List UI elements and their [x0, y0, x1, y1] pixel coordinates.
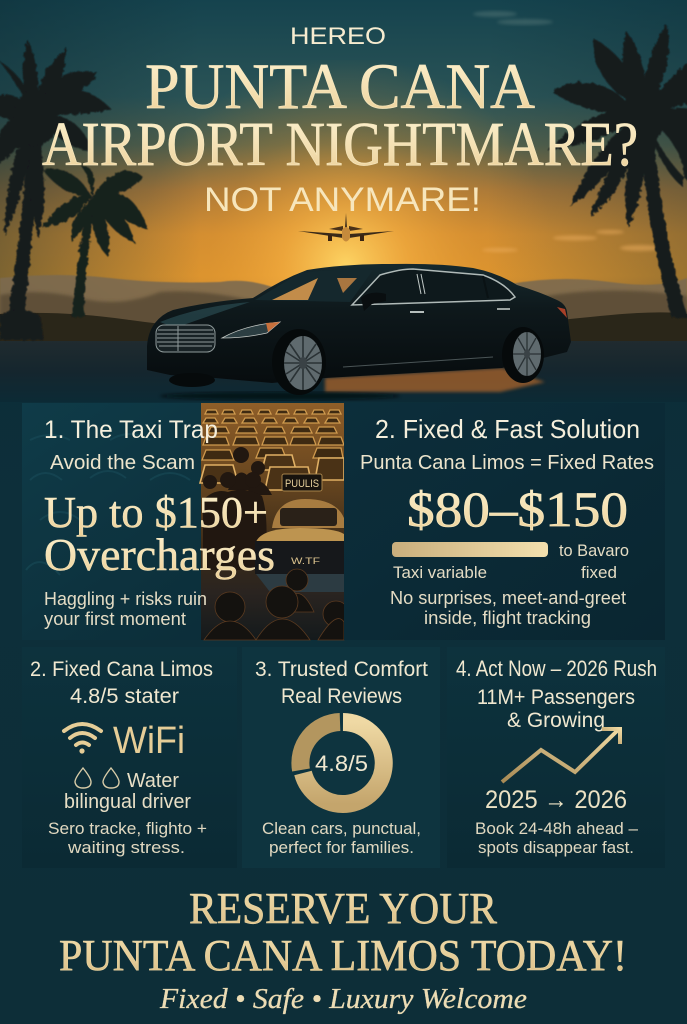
subtitle: NOT ANYMARE!: [204, 181, 481, 219]
grille: [156, 325, 215, 352]
sun glow: [130, 60, 560, 345]
windshield: [255, 269, 373, 302]
comparison bar: [392, 542, 548, 557]
water label: Water: [127, 770, 179, 792]
taxi car 1: [272, 499, 344, 528]
side windows: [352, 269, 515, 305]
body text: Haggling + risks ruin: [44, 589, 207, 609]
subheading: Real Reviews: [281, 685, 402, 708]
body text: spots disappear fast.: [478, 838, 634, 857]
taxi jam photo: [200, 403, 349, 640]
icon: water drops: [75, 768, 119, 788]
palm: large left: [0, 40, 112, 340]
panel: trusted comfort: [242, 647, 440, 868]
panel: fixed cana limos: [22, 647, 237, 868]
body text: your first moment: [44, 609, 186, 629]
heading: 1. The Taxi Trap: [44, 416, 218, 444]
subheading: Avoid the Scam: [50, 452, 195, 474]
wifi label: WiFi: [113, 720, 185, 762]
sunset sky: [0, 0, 687, 345]
hero scene: sunset sky, palms, plane and limo: [0, 0, 687, 402]
heading: 2. Fixed & Fast Solution: [375, 414, 640, 444]
hood highlight: [160, 302, 250, 328]
car body: [147, 264, 571, 383]
taxi sign: [282, 474, 322, 491]
tagline: Fixed • Safe • Luxury Welcome: [159, 984, 527, 1015]
cta line 1: RESERVE YOUR: [189, 884, 498, 933]
crowd silhouettes: [204, 569, 349, 640]
rear light: [557, 307, 567, 318]
big stat: Up to $150+: [44, 488, 268, 537]
orange reflection on road: [325, 368, 545, 392]
bar label: taxi variable: Taxi variable: [393, 563, 487, 582]
panel: the taxi trap: [22, 403, 349, 640]
body text: waiting stress.: [67, 838, 185, 857]
big stat line 2: Overcharges: [44, 530, 275, 580]
panel: fixed and fast solution: [344, 403, 665, 640]
limo car: [147, 264, 571, 400]
subheading: 11M+ Passengers: [477, 686, 635, 709]
body text: Sero tracke, flighto +: [48, 819, 207, 838]
sunset clouds: [482, 230, 660, 252]
taxi car 2: [255, 528, 344, 545]
call to action: [59, 884, 627, 1015]
silhouettes in traffic: [203, 447, 272, 570]
heading: 4. Act Now – 2026 Rush: [456, 656, 657, 681]
body text: No surprises, meet-and-greet: [390, 588, 626, 608]
driver label: bilingual driver: [64, 791, 191, 813]
subheading: & Growing: [507, 709, 605, 732]
body text: inside, flight tracking: [424, 608, 591, 628]
icon: airplane: [298, 213, 394, 242]
donut chart: 4.8/5 rating: [300, 722, 384, 804]
front wheel: [272, 329, 326, 395]
body text: perfect for families.: [269, 838, 414, 857]
price: $80–$150: [407, 481, 628, 537]
body text: Book 24-48h ahead –: [475, 819, 639, 838]
growth arrow: [502, 729, 620, 782]
bar label: fixed: fixed: [581, 563, 617, 582]
faint taxi rows: [26, 434, 190, 575]
taxi jam photo: W.TF: [291, 556, 321, 566]
palm: large right: [547, 25, 687, 318]
panel: act now 2026 rush: [447, 647, 665, 868]
subheading: Punta Cana Limos = Fixed Rates: [360, 452, 654, 474]
body text: Clean cars, punctual,: [262, 819, 421, 838]
title line 1: PUNTA CANA: [145, 51, 535, 123]
clouds: [473, 11, 553, 25]
heading: 2. Fixed Cana Limos: [30, 658, 213, 681]
rear wheel: [502, 327, 544, 383]
rows of taxis: [202, 410, 344, 460]
road: [0, 341, 687, 402]
heading: 3. Trusted Comfort: [255, 658, 428, 681]
hero eyebrow: HEREO: HEREO: [290, 23, 386, 50]
taxi sign: PUULIS: [285, 478, 319, 490]
distant hills: [0, 275, 687, 345]
headlight: [222, 322, 280, 338]
rating: 4.8/5 stater: [70, 685, 179, 708]
donut value: 4.8/5: [315, 751, 368, 776]
mirror: [361, 293, 386, 311]
icon: wifi: [64, 724, 101, 753]
cta line 2: PUNTA CANA LIMOS TODAY!: [59, 931, 627, 980]
door handles: [410, 311, 424, 313]
bar label: to Bavaro: to Bavaro: [559, 541, 629, 560]
palm: mid left: [42, 165, 148, 317]
years label: 2025 → 2026: [485, 786, 627, 814]
